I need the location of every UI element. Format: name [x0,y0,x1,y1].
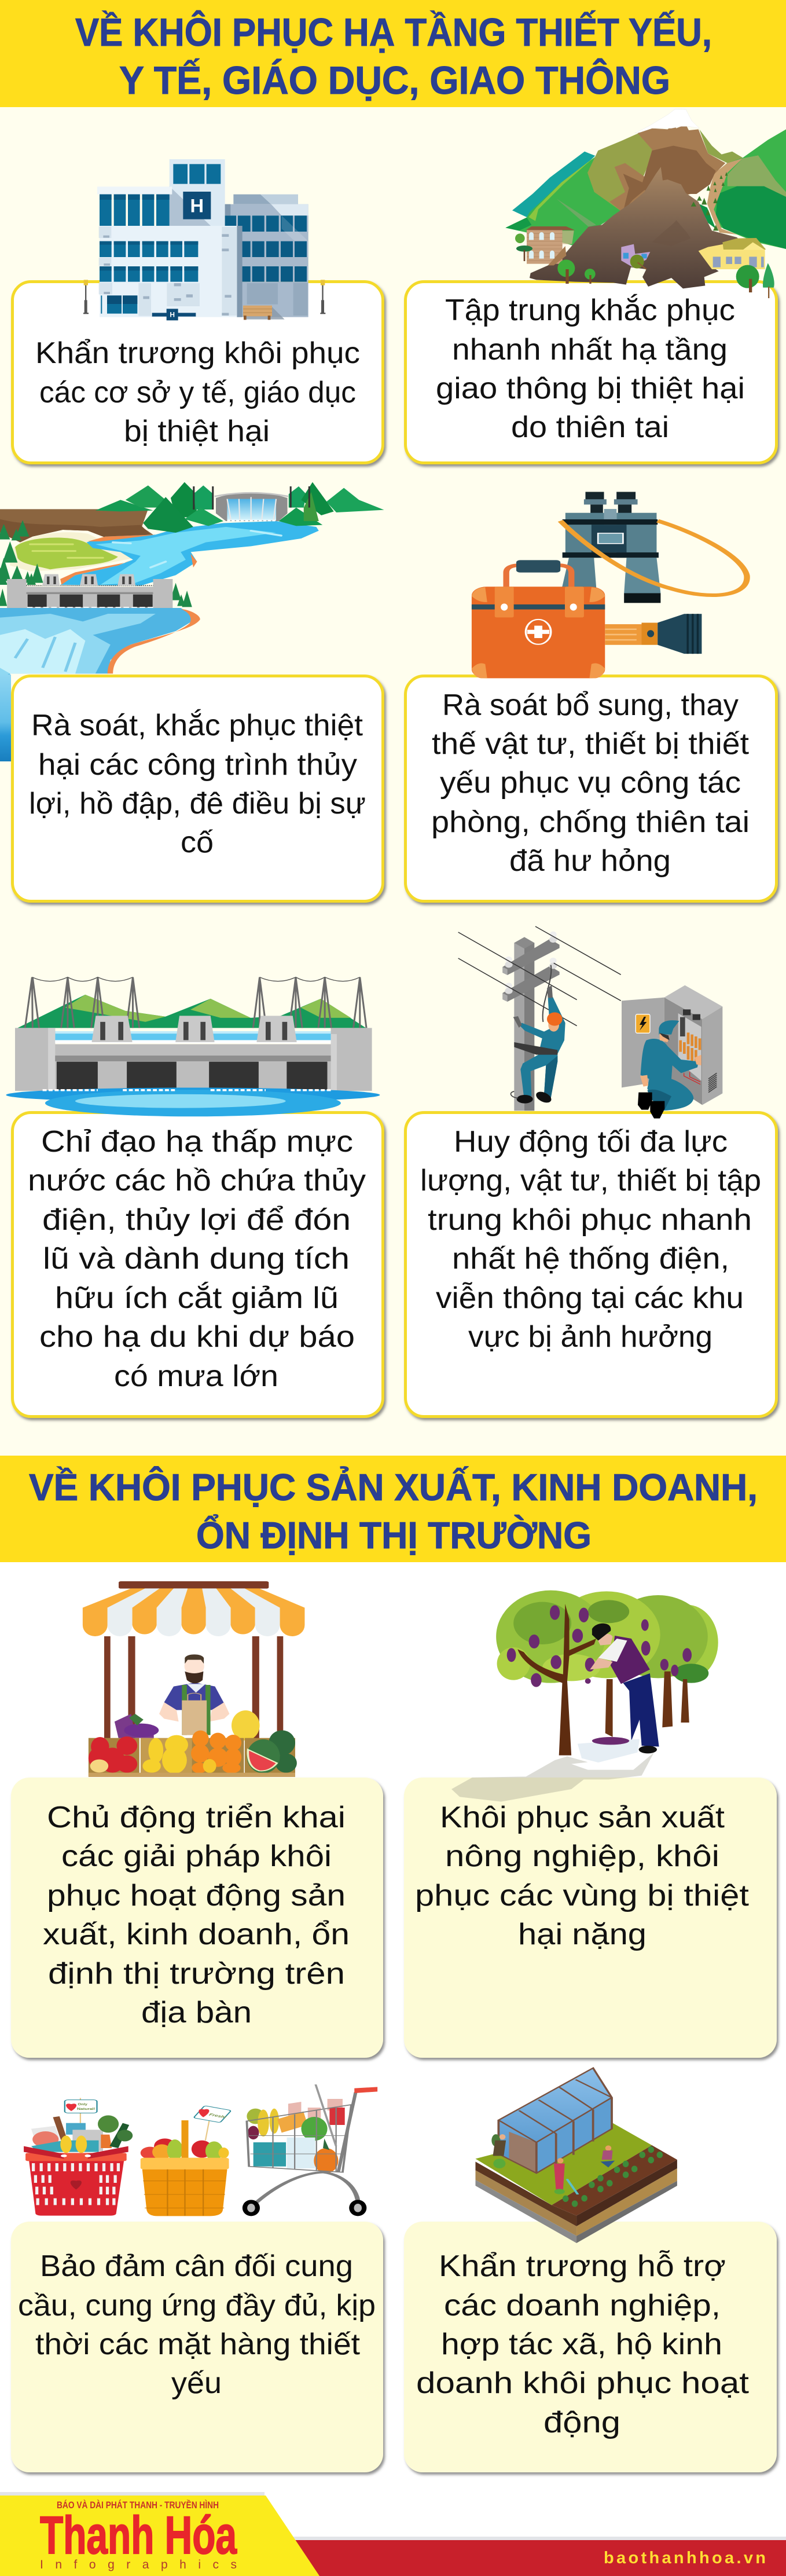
orange fruit basket [141,2106,232,2216]
card text: Rà soát, khắc phục thiệt [31,709,363,742]
card text: hợp tác xã, hộ kinh [441,2328,722,2361]
card text: hại nặng [518,1918,647,1951]
panel: giải pháp khôi phục sản xuất kinh doanh [11,1778,383,2058]
card text: phục hoạt động sản [47,1879,346,1912]
footer logo block: BÁO VÀ DÀI PHÁT THANH - TRUYỀN HÌNH [57,2500,219,2511]
icon: electricians at pole and switchboard [458,926,722,1119]
card text [29,709,366,859]
panel: cân đối cung cầu [11,2222,383,2472]
vendor [159,1654,229,1735]
panel: hỗ trợ doanh nghiệp [404,2222,777,2472]
header title text [75,10,712,102]
panel: vật tư, thiết bị [405,676,777,901]
footer logo block [0,2492,319,2576]
kneeling worker [638,1020,701,1119]
header: hạ tầng thiết yếu [0,0,786,107]
gardeners [491,2134,615,2194]
panel: khôi phục cơ sở y tế [13,281,383,463]
card text: Khẩn trương khôi phục [35,336,360,370]
card text [18,2249,376,2400]
card text: Chỉ đạo hạ thấp mực [41,1125,353,1159]
card text: bị thiệt hại [124,415,270,448]
card text: Khẩn trương hỗ trợ [439,2249,726,2283]
header title text: Y TẾ, GIÁO DỤC, GIAO THÔNG [119,58,670,102]
icon: greenhouse on isometric farm plot [475,2068,677,2243]
card text: vực bị ảnh hưởng [468,1320,712,1354]
card text [436,294,745,444]
card text: phục các vùng bị thiệt [415,1879,750,1912]
card text: các cơ sở y tế, giáo dục [39,376,356,409]
card text: yếu [171,2366,222,2400]
climbing worker [511,965,565,1105]
icon: farmer harvesting grapes [451,1591,718,1802]
card text: có mưa lớn [114,1360,278,1393]
icon: hospital building [83,159,325,320]
panel: hệ thống điện, viễn thông [405,1113,777,1416]
switchboard cabinet [622,985,722,1105]
panel: sản xuất nông nghiệp [404,1778,777,2058]
card text: nhanh nhất hạ tầng [452,333,728,367]
card text: giao thông bị thiệt hại [436,372,745,405]
utility pole [502,932,560,1111]
card text: lợi, hồ đập, đê điều bị sự [29,787,366,820]
card text [28,1125,366,1393]
footer red band [289,2537,786,2576]
icon: hospital building: H [190,195,204,216]
shopping cart [243,2084,377,2216]
card text: do thiên tai [511,411,669,444]
card text: xuất, kinh doanh, ổn [43,1918,350,1951]
card text: doanh khôi phục hoạt [416,2366,750,2400]
header: sản xuất, kinh doanh [0,1456,786,1562]
header title text: VỀ KHÔI PHỤC HẠ TẦNG THIẾT YẾU, [75,10,712,54]
card text: đã hư hỏng [509,844,671,878]
card text: nông nghiệp, khôi [445,1840,719,1873]
farmer figure [590,1624,659,1753]
footer logo block: Infographics [40,2558,237,2571]
icon: binoculars, first aid kit and flashlight [472,492,747,678]
card text: các giải pháp khôi [61,1840,332,1873]
card text: động [543,2406,620,2439]
vine foliage [496,1591,718,1683]
header title text [29,1466,758,1556]
card text [43,1801,350,2029]
card text: địa bàn [141,1996,252,2029]
card text: Tập trung khắc phục [445,294,735,327]
card text: Bảo đảm cân đối cung [40,2249,353,2283]
binoculars [561,492,660,603]
card text [416,2249,750,2439]
striped awning [83,1588,304,1636]
card text [35,336,360,448]
panel: hạ tầng giao thông [405,281,777,463]
card text: các doanh nghiệp, [444,2289,721,2322]
first aid kit [472,560,605,678]
card text: hại các công trình thủy [38,748,357,782]
card text: viễn thông tại các khu [436,1281,744,1315]
header title text: VỀ KHÔI PHỤC SẢN XUẤT, KINH DOANH, [29,1466,758,1508]
icon: shopping baskets and cart [24,2084,377,2216]
card text: hữu ích cắt giảm lũ [55,1281,339,1315]
red basket [24,2098,133,2216]
flashlight [605,614,701,654]
icon: river and dams [0,482,384,702]
grape crate [578,1737,640,1762]
icon: hydropower dam with pylons [6,977,380,1116]
orange fruit basket: Fresh! [208,2113,227,2119]
footer logo block: Thanh Hóa [40,2506,237,2565]
card text [415,1801,750,1951]
card text [431,688,750,878]
header title text: ỔN ĐỊNH THỊ TRƯỜNG [196,1514,592,1556]
card text: nhất hệ thống điện, [452,1242,729,1276]
icon: landslide on mountain [505,109,786,298]
card text: Rà soát bổ sung, thay [442,688,739,722]
card text: thời các mặt hàng thiết [35,2328,361,2361]
card text: định thị trường trên [48,1957,345,1991]
card text: thế vật tư, thiết bị thiết [432,727,750,761]
panel: hồ chứa thủy điện [13,1113,383,1416]
page background: cream section [0,107,786,1459]
card text: phòng, chống thiên tai [431,805,750,839]
card text: lượng, vật tư, thiết bị tập [420,1164,761,1197]
card text: cố [181,826,214,859]
fruit crates [89,1710,297,1777]
card text: điện, thủy lợi để đón [42,1203,351,1237]
card text [420,1125,761,1354]
icon: hospital building: H [170,311,175,319]
card text: trung khôi phục nhanh [428,1203,752,1237]
card text: cầu, cung ứng đầy đủ, kịp [18,2289,376,2322]
card text: Khôi phục sản xuất [440,1801,725,1834]
panel: công trình thủy lợi [13,676,383,901]
card text: Chủ động triển khai [47,1801,346,1834]
website address: baothanhhoa.vn [604,2549,766,2567]
icon: market stall [83,1581,304,1777]
water column beside card [0,675,11,761]
card text: lũ và dành dung tích [43,1242,350,1276]
card text: Huy động tối đa lực [454,1125,728,1159]
card text: cho hạ du khi dự báo [39,1320,355,1354]
card text: nước các hồ chứa thủy [28,1164,366,1197]
red basket: Only [78,2102,87,2106]
greenhouse [498,2068,612,2173]
red basket: Natural! [77,2107,95,2111]
card text: yếu phục vụ công tác [440,766,741,800]
